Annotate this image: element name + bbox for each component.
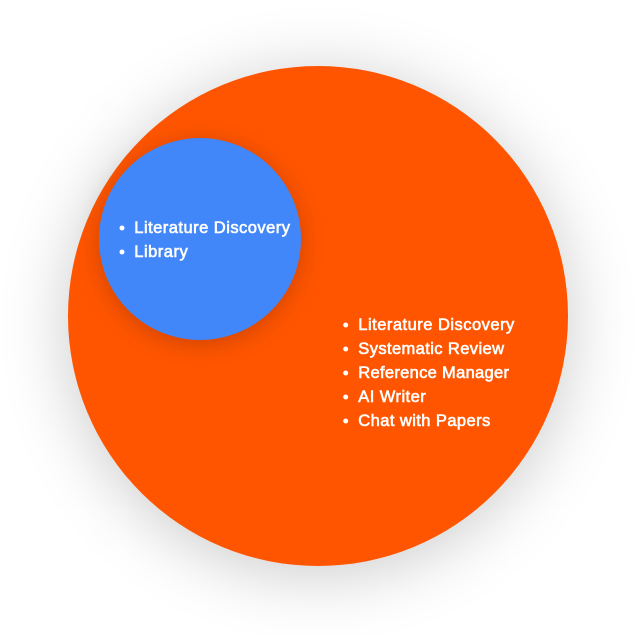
text block: orange circle feature list: Reference Manager <box>358 364 510 382</box>
text block: blue circle feature list <box>120 219 291 261</box>
panel: small blue circle <box>99 138 301 340</box>
text block: blue circle feature list: Library <box>134 243 188 261</box>
text block: orange circle feature list: Chat with Papers <box>358 412 490 430</box>
text block: orange circle feature list: Literature Discovery <box>358 316 515 334</box>
text block: orange circle feature list: Systematic Review <box>358 340 504 358</box>
panel: large orange circle <box>68 66 568 566</box>
text block: orange circle feature list <box>343 316 515 430</box>
text block: blue circle feature list: Literature Discovery <box>134 219 291 237</box>
text block: orange circle feature list: AI Writer <box>358 388 426 406</box>
